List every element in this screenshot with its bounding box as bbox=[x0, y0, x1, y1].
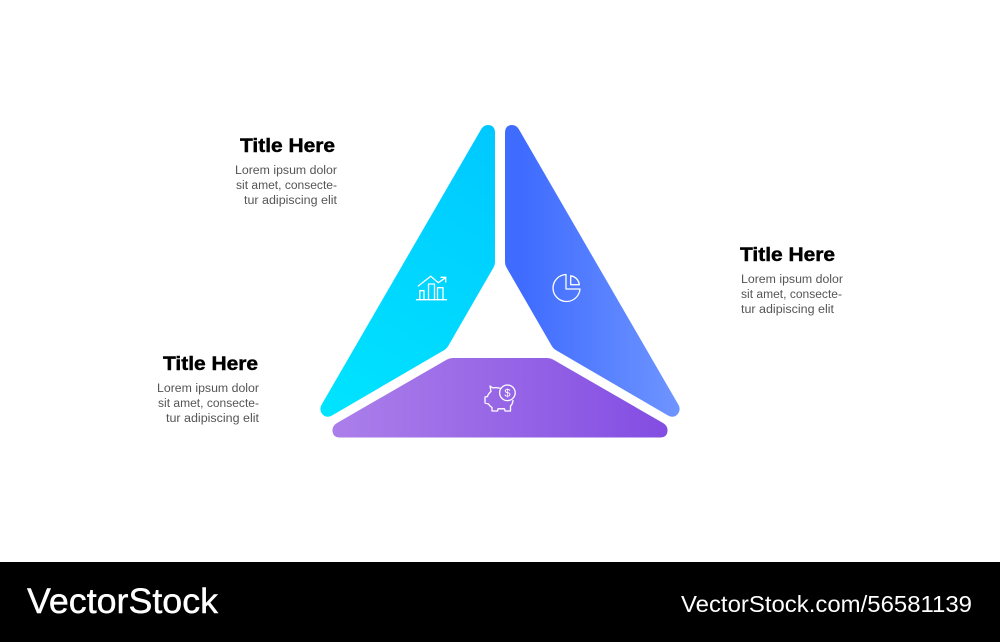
heading: top left title: Title Here bbox=[240, 135, 335, 157]
panel: cyan left segment bbox=[320, 125, 495, 417]
panel: purple bottom segment bbox=[332, 358, 668, 438]
text block: right bbox=[740, 244, 843, 316]
text block: bottom left: sit amet, consecte- bbox=[158, 398, 259, 410]
text block: right: sit amet, consecte- bbox=[741, 289, 842, 301]
text block: bottom left: Lorem ipsum dolor bbox=[157, 383, 259, 395]
icon: pie chart bbox=[553, 274, 580, 301]
text block: top left bbox=[235, 135, 338, 207]
footer bar bbox=[0, 562, 1000, 642]
text block: right: tur adipiscing elit bbox=[741, 304, 835, 316]
text block: bottom left bbox=[157, 353, 260, 425]
icon: piggy bank with dollar coin bbox=[485, 385, 515, 411]
text block: top left: tur adipiscing elit bbox=[244, 195, 338, 207]
panel: blue right segment bbox=[505, 125, 680, 417]
heading: bottom left title: Title Here bbox=[163, 353, 258, 375]
footer logo: VectorStock bbox=[27, 582, 219, 621]
icon: piggy bank with dollar coin: $ bbox=[504, 388, 510, 400]
text block: top left: Lorem ipsum dolor bbox=[235, 165, 337, 177]
heading: right title: Title Here bbox=[740, 244, 835, 266]
text block: bottom left: tur adipiscing elit bbox=[166, 413, 260, 425]
footer url: VectorStock.com/56581139 bbox=[681, 591, 972, 617]
text block: right: Lorem ipsum dolor bbox=[741, 274, 843, 286]
icon: growth chart bbox=[416, 276, 446, 300]
text block: top left: sit amet, consecte- bbox=[236, 180, 337, 192]
